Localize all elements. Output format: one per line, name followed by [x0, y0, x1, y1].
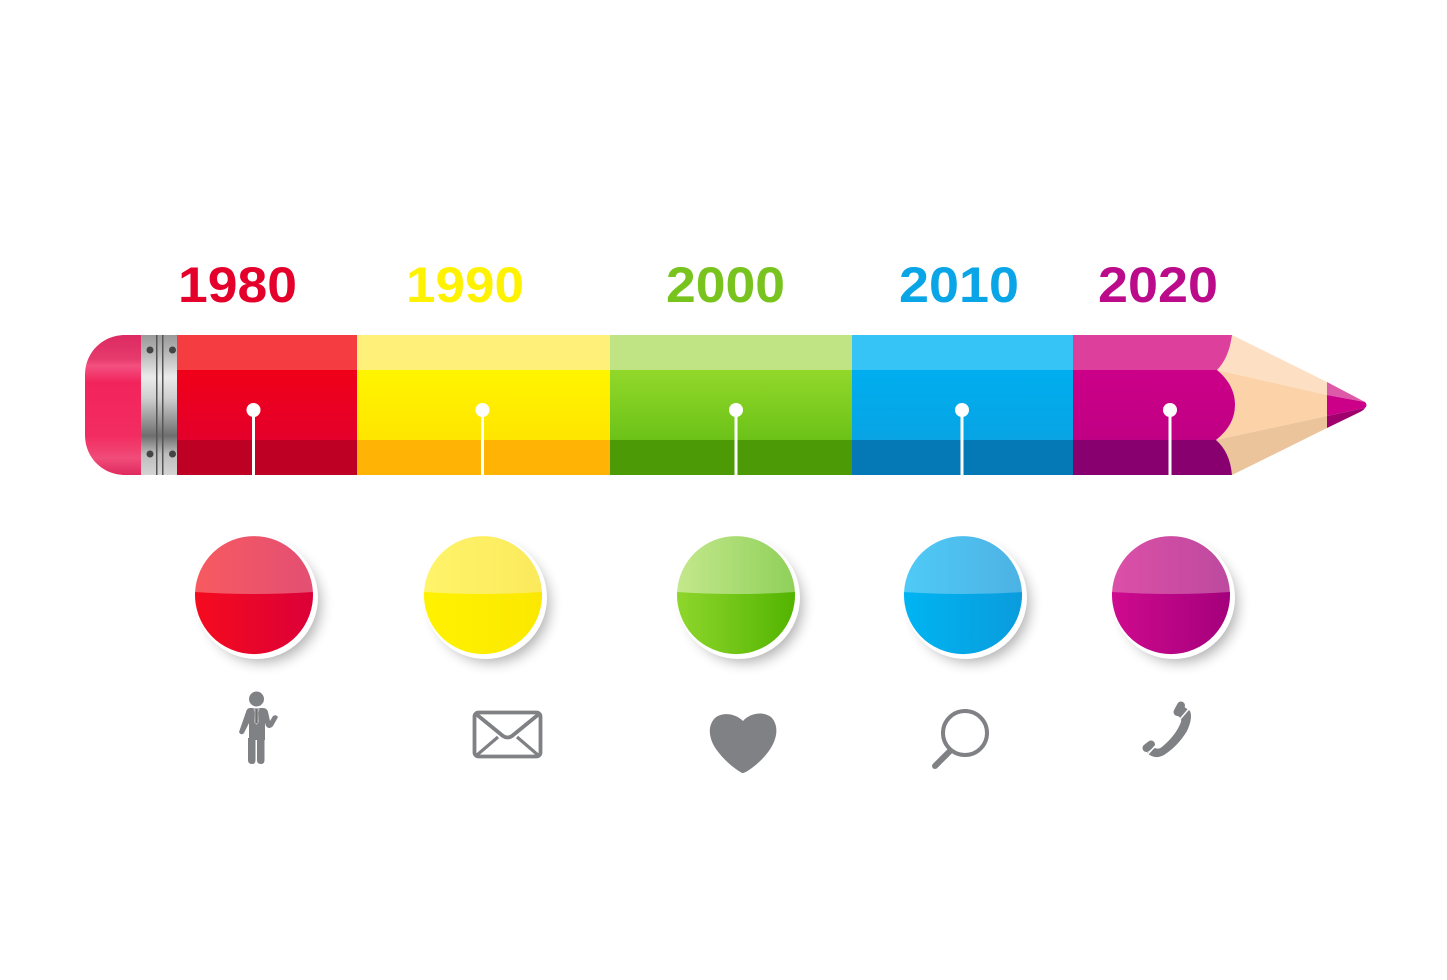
year label: 2010: 2010: [899, 257, 1019, 313]
icon: telephone: [1146, 706, 1191, 757]
timeline pin: 2020: [1163, 403, 1177, 475]
circle badge: yellow: [424, 536, 549, 662]
year label: 1980: 1980: [178, 257, 297, 313]
segment: yellow 1990: [357, 335, 610, 475]
icon: magnifying glass: [935, 711, 987, 766]
circle badge: magenta: [1112, 536, 1237, 662]
icon: businessman: [239, 692, 278, 764]
circle badge: blue: [904, 536, 1029, 662]
circle badge: green: [677, 536, 802, 662]
pencil tip: lead: [1327, 382, 1366, 428]
timeline pin: 2010: [955, 403, 969, 475]
segment: green 2000: [610, 335, 852, 475]
eraser: [85, 335, 141, 475]
timeline pin: 2000: [729, 403, 743, 475]
year label: 2020: 2020: [1098, 257, 1218, 313]
segment: red 1980: [177, 335, 357, 475]
year label: 2000: 2000: [666, 257, 785, 313]
segment: blue 2010: [852, 335, 1073, 475]
icon: heart: [710, 714, 776, 773]
segment: magenta 2020: [1073, 335, 1235, 475]
metal ferrule: [141, 335, 177, 475]
icon: envelope: [474, 712, 540, 756]
circle badge: red: [195, 536, 320, 662]
timeline pin: 1980: [246, 403, 260, 475]
pencil tip: wood: [1216, 335, 1327, 475]
timeline pin: 1990: [476, 403, 490, 475]
pencil: [85, 335, 1366, 475]
year label: 1990: 1990: [406, 257, 524, 313]
